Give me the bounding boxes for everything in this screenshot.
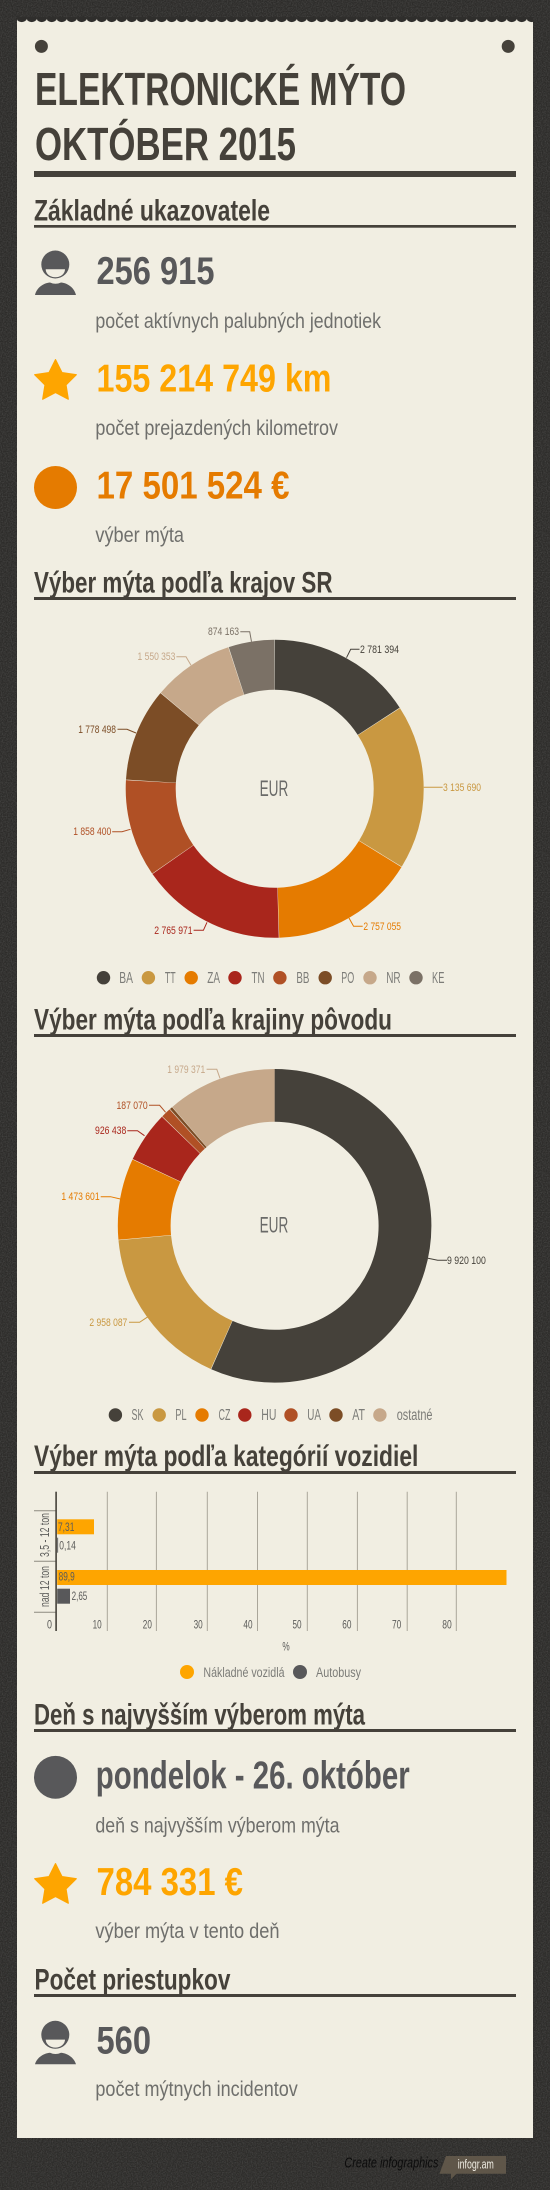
data labels: kraje: 3 135 690 — [443, 782, 481, 794]
heading: Deň s najvyšším výberom mýta — [34, 1699, 365, 1732]
bars: 3,5 - 12 ton — [57, 1519, 94, 1553]
data labels: krajiny: 1 473 601 — [61, 1191, 100, 1203]
donut center label: EUR — [260, 1213, 288, 1238]
x axis labels: 10 — [93, 1617, 102, 1631]
legend: krajiny: HU — [261, 1407, 276, 1424]
data labels: kraje: 1 858 400 — [73, 826, 111, 838]
legend: krajiny: UA — [307, 1407, 321, 1424]
bars: nad 12 ton: 2,65 — [72, 1589, 88, 1603]
heading: Počet priestupkov — [34, 1963, 231, 1996]
legend: krajiny: PL — [175, 1407, 187, 1424]
stat: incidenty: 560 — [96, 2019, 151, 2062]
legend: kraje: TT — [165, 970, 176, 987]
x axis labels: % — [282, 1640, 290, 1654]
legend: vozidlá — [180, 1665, 361, 1680]
bars: nad 12 ton: 89,9 — [59, 1570, 75, 1584]
stat: kilometre: počet prejazdených kilometrov — [95, 416, 338, 440]
heading: Základné ukazovatele — [34, 195, 270, 228]
x axis labels: 60 — [342, 1617, 352, 1631]
x axis labels: 50 — [292, 1617, 302, 1631]
legend: krajiny — [109, 1407, 432, 1424]
right punch hole — [502, 40, 515, 53]
stat: výber mýta — [95, 465, 290, 547]
data labels: kraje: 2 757 055 — [363, 921, 401, 933]
section: výber mýta podľa kategórií vozidiel — [34, 1440, 516, 1680]
bars: nad 12 ton — [57, 1570, 506, 1604]
legend: krajiny: SK — [132, 1407, 144, 1424]
icon: orange circle — [34, 466, 77, 509]
stat: výber v tento deň: výber mýta v tento deň — [95, 1919, 280, 1943]
stat: deň: pondelok - 26. október — [96, 1754, 410, 1797]
heading: Výber mýta podľa kategórií vozidiel — [34, 1440, 418, 1473]
bars: 3,5 - 12 ton: 0,14 — [59, 1538, 76, 1552]
stat: incidenty: počet mýtnych incidentov — [95, 2077, 298, 2101]
stat: palubné jednotky: počet aktívnych palubných jednotiek — [95, 309, 381, 333]
stat: palubné jednotky: 256 915 — [96, 250, 214, 293]
x axis labels: 80 — [442, 1617, 452, 1631]
legend: krajiny: AT — [352, 1407, 365, 1424]
title — [34, 63, 516, 177]
stat: kilometre: 155 214 749 km — [96, 358, 332, 400]
donut chart: kraje — [151, 665, 399, 913]
legend: kraje: ZA — [207, 970, 220, 987]
icon: grey circle — [34, 1756, 77, 1799]
data labels: krajiny: 1 979 371 — [167, 1064, 205, 1076]
x axis labels — [47, 1617, 452, 1654]
x axis labels: 0 — [47, 1617, 52, 1631]
data labels: kraje: 2 765 971 — [154, 925, 193, 937]
data labels: krajiny: 2 958 087 — [89, 1317, 127, 1329]
stat: deň — [95, 1754, 410, 1837]
stat: deň: deň s najvyšším výberom mýta — [95, 1813, 340, 1837]
badge: infogr.am: infogr.am — [458, 2157, 494, 2172]
x axis labels: 30 — [194, 1617, 203, 1631]
x axis labels: 70 — [392, 1617, 402, 1631]
data labels: kraje: 2 781 394 — [360, 644, 399, 656]
data labels: kraje: 1 778 498 — [78, 724, 116, 736]
bar chart — [34, 1492, 506, 1654]
icon: star — [35, 1864, 76, 1903]
legend: kraje: BA — [119, 970, 133, 987]
x axis labels: 40 — [243, 1617, 253, 1631]
legend: kraje: KE — [432, 970, 444, 987]
category labels: nad 12 ton — [37, 1566, 52, 1607]
bars: 3,5 - 12 ton: 7,31 — [58, 1520, 75, 1534]
legend: kraje: TN — [252, 970, 264, 987]
stat: incidenty — [95, 2019, 298, 2101]
section: výber mýta podľa krajiny pôvodu — [34, 1004, 516, 1424]
heading: Výber mýta podľa krajiny pôvodu — [34, 1004, 392, 1036]
title: OKTÓBER 2015 — [35, 118, 296, 170]
data labels: kraje — [73, 626, 481, 937]
legend: kraje: PO — [341, 970, 354, 987]
legend: kraje: BB — [296, 970, 309, 987]
icon: star — [35, 360, 76, 399]
stat: výber mýta: 17 501 524 € — [96, 465, 290, 508]
heading — [34, 1963, 516, 1997]
stat: výber v tento deň: 784 331 € — [96, 1861, 243, 1904]
title: ELEKTRONICKÉ MÝTO — [35, 63, 406, 115]
footer: credit — [344, 2154, 506, 2179]
data labels: krajiny: 187 070 — [116, 1100, 148, 1112]
legend: kraje — [97, 970, 444, 987]
heading: Výber mýta podľa krajov SR — [34, 567, 333, 600]
donut chart: krajiny — [144, 1095, 405, 1356]
icon: person — [35, 2021, 76, 2064]
donut center label: EUR — [260, 776, 288, 801]
legend: vozidlá: Nákladné vozidlá — [203, 1665, 285, 1680]
data labels: krajiny — [61, 1064, 486, 1329]
category labels — [37, 1513, 52, 1607]
data labels: kraje: 874 163 — [208, 626, 239, 638]
stat: palubné jednotky — [95, 250, 381, 333]
stat: kilometre — [95, 358, 338, 440]
stat: výber v tento deň — [95, 1861, 280, 1943]
data labels: krajiny: 9 920 100 — [447, 1255, 486, 1267]
legend: krajiny: ostatné — [397, 1407, 432, 1424]
icon: person — [35, 250, 76, 295]
stat: výber mýta: výber mýta — [95, 523, 184, 547]
x axis labels: 20 — [143, 1617, 152, 1631]
legend: kraje: NR — [386, 970, 401, 987]
data labels: krajiny: 926 438 — [95, 1125, 126, 1137]
section: výber mýta podľa krajov — [34, 567, 516, 987]
legend: vozidlá: Autobusy — [316, 1665, 361, 1680]
footer: credit: Create infographics — [344, 2154, 439, 2171]
data labels: kraje: 1 550 353 — [138, 651, 175, 663]
left punch hole — [35, 40, 48, 53]
badge: infogr.am — [440, 2156, 506, 2179]
legend: krajiny: CZ — [218, 1407, 230, 1424]
section: deň s najvyšším výberom mýta — [34, 1699, 516, 1943]
category labels: 3,5 - 12 ton — [37, 1513, 52, 1557]
section: počet priestupkov — [34, 1963, 516, 2101]
section: základné ukazovatele — [34, 195, 516, 547]
